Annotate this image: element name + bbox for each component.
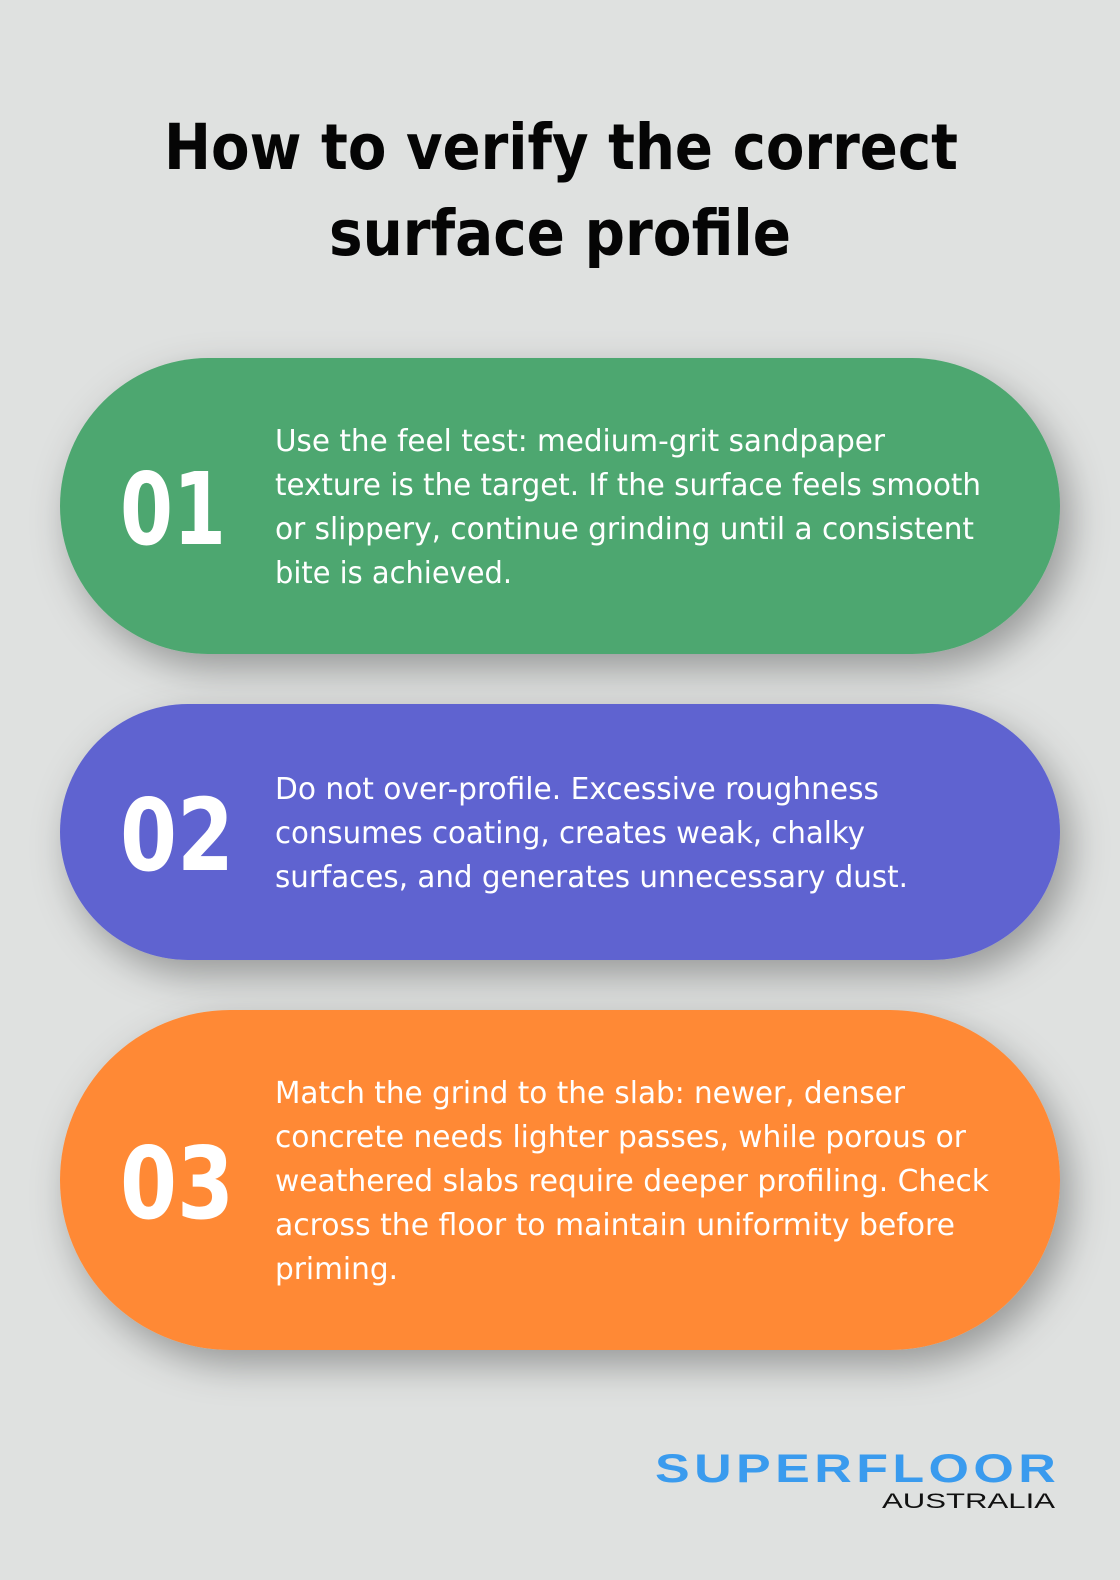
panel: step 02 (60, 704, 1060, 960)
panel: step 03 (60, 1010, 1060, 1350)
text block: step 03: priming. (275, 1252, 398, 1287)
text block: step 01 (275, 424, 981, 591)
pill background: green (60, 358, 1060, 654)
text block: step 01: or slippery, continue grinding until a consistent (275, 512, 974, 547)
logo: Superfloor Australia (655, 1446, 1060, 1513)
title (164, 111, 958, 270)
text block: step 02 (275, 772, 908, 895)
text block: step 03: weathered slabs require deeper profiling. Check (275, 1164, 990, 1199)
pill background: orange (60, 1010, 1060, 1350)
text block: step 03: across the floor to maintain uniformity before (275, 1208, 955, 1243)
panel: step 01 (60, 358, 1060, 654)
text block: step 02: surfaces, and generates unnecessary dust. (275, 860, 908, 895)
text block: step 03: Match the grind to the slab: newer, denser (275, 1076, 906, 1111)
text block: step 02: Do not over-profile. Excessive roughness (275, 772, 879, 807)
title: How to verify the correct (164, 111, 958, 184)
text block: step 01: bite is achieved. (275, 556, 512, 591)
number 01: 01 (120, 451, 226, 568)
text block: step 01: texture is the target. If the surface feels smooth (275, 468, 981, 503)
pill background: blue (60, 704, 1060, 960)
text block: step 03 (275, 1076, 990, 1287)
number 02: 02 (120, 777, 234, 894)
text block: step 01: Use the feel test: medium-grit sandpaper (275, 424, 886, 459)
number 03: 03 (120, 1125, 234, 1242)
logo: Superfloor Australia: SUPERFLOOR (655, 1446, 1060, 1491)
text block: step 02: consumes coating, creates weak, chalky (275, 816, 865, 851)
text block: step 03: concrete needs lighter passes, while porous or (275, 1120, 967, 1155)
title: surface profile (329, 197, 791, 270)
logo: Superfloor Australia: AUSTRALIA (882, 1490, 1055, 1513)
